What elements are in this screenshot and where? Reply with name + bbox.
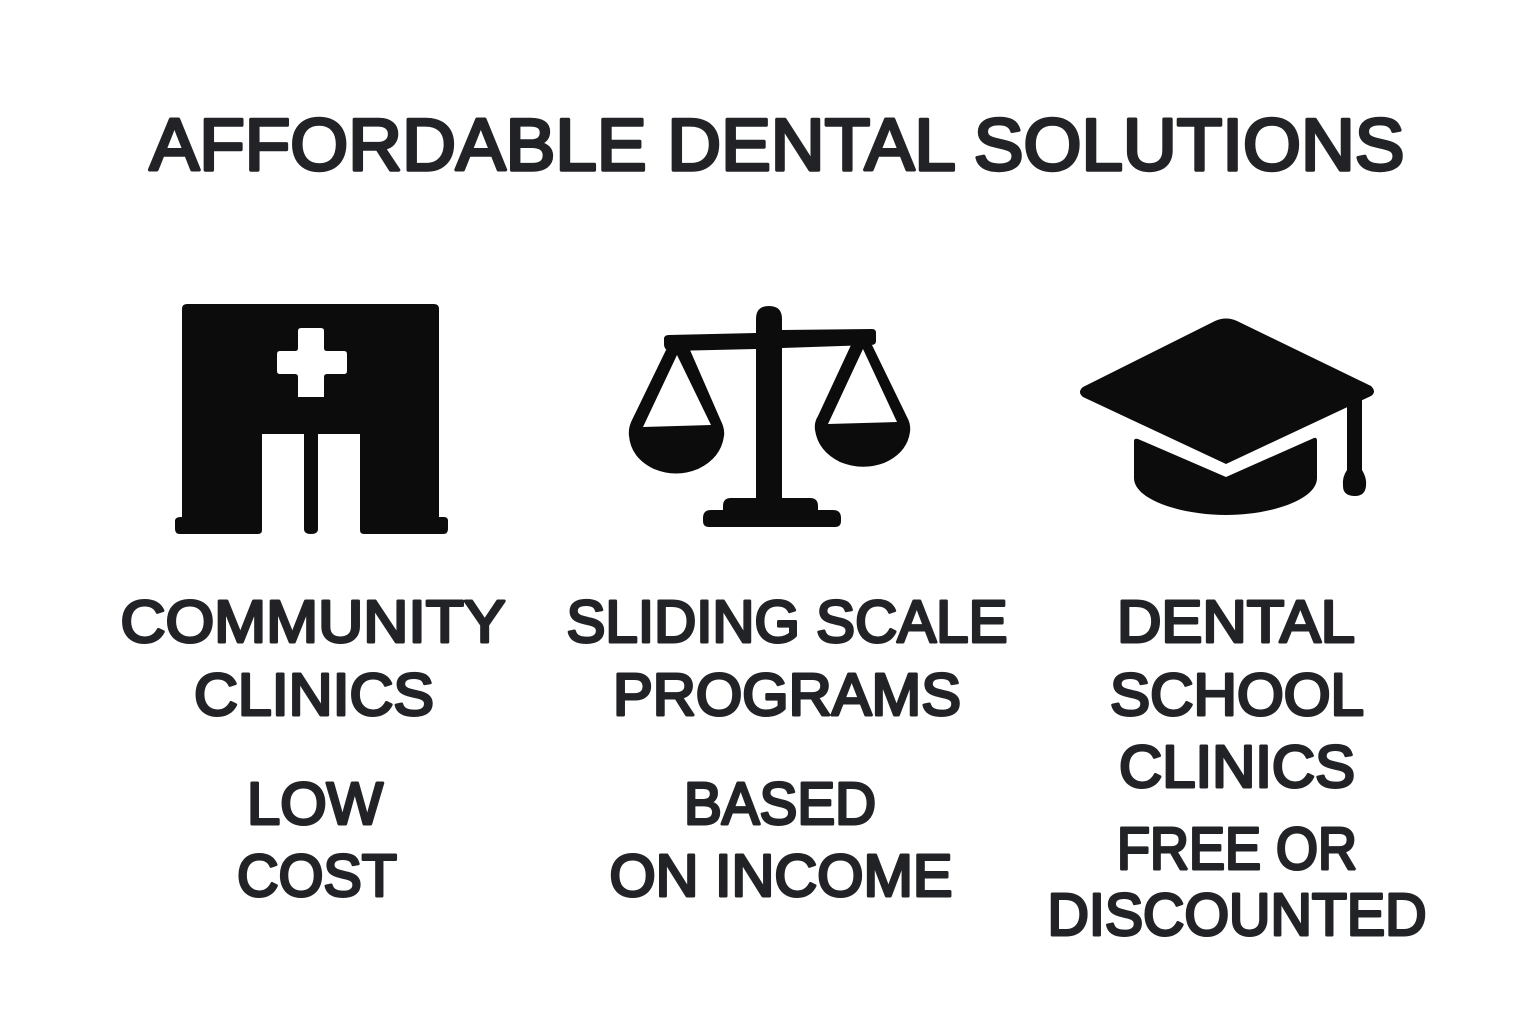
text: free or discounted: FREE OR (1117, 816, 1357, 882)
heading: community clinics (120, 589, 506, 728)
icon: balance scales (629, 306, 910, 527)
heading: dental school clinics: DENTAL (1117, 589, 1355, 655)
heading: community clinics: COMMUNITY (120, 589, 506, 655)
heading: sliding scale programs: SLIDING SCALE (566, 589, 1008, 655)
heading: dental school clinics: SCHOOL (1110, 662, 1364, 728)
text: low cost: LOW (247, 771, 383, 837)
heading: community clinics: CLINICS (194, 662, 434, 728)
icon: graduation cap (1080, 318, 1374, 515)
text: based on income (610, 771, 952, 909)
text: free or discounted: DISCOUNTED (1048, 882, 1426, 948)
text: free or discounted (1048, 816, 1426, 948)
heading: sliding scale programs (566, 589, 1008, 728)
icon: clinic building (175, 304, 448, 534)
text: low cost: COST (237, 843, 397, 909)
text: based on income: BASED (684, 771, 876, 837)
heading: dental school clinics: CLINICS (1119, 734, 1355, 800)
text: based on income: ON INCOME (610, 843, 952, 909)
title: AFFORDABLE DENTAL SOLUTIONS (150, 105, 1404, 186)
heading: sliding scale programs: PROGRAMS (613, 662, 961, 728)
heading: dental school clinics (1110, 589, 1364, 800)
text: low cost (237, 771, 397, 909)
